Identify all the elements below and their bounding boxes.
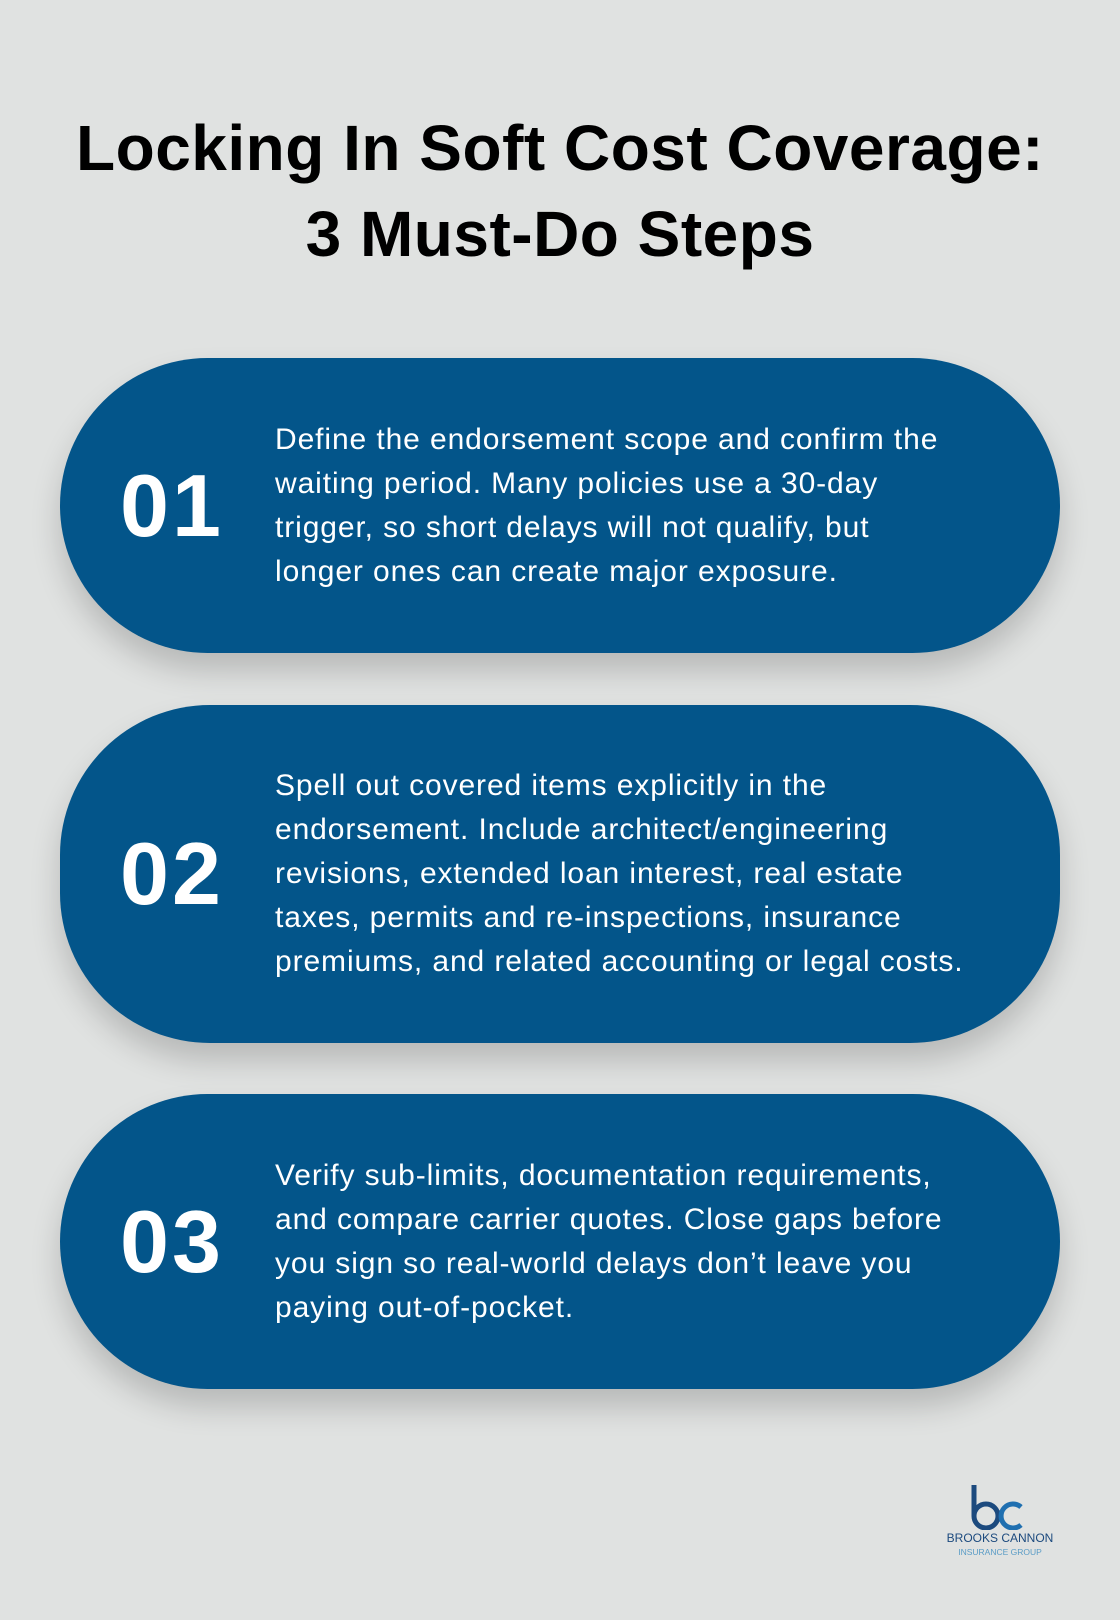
panel: step 01 — [60, 358, 1060, 653]
logo text — [947, 1531, 1053, 1557]
title: Locking In Soft Cost Coverage: — [76, 112, 1044, 184]
title: 3 Must-Do Steps — [306, 198, 814, 270]
logo — [947, 1485, 1053, 1557]
text step 01: Define the endorsement scope and confirm the — [275, 422, 938, 456]
panel: step 03 — [60, 1094, 1060, 1389]
logo text: INSURANCE GROUP — [958, 1547, 1042, 1557]
text step 02 — [275, 769, 964, 978]
number 03: 03 — [120, 1192, 224, 1290]
text step 01: longer ones can create major exposure. — [275, 554, 838, 588]
title — [76, 112, 1044, 270]
text step 01: trigger, so short delays will not qualify, but — [275, 510, 869, 544]
text step 02: taxes, permits and re-inspections, insurance — [275, 901, 902, 934]
text step 02: Spell out covered items explicitly in the — [275, 769, 827, 802]
text step 03: you sign so real-world delays don’t leave you — [275, 1246, 912, 1280]
number 02: 02 — [120, 824, 224, 923]
text step 01 — [275, 422, 938, 588]
text step 03 — [275, 1158, 943, 1324]
text step 03: paying out-of-pocket. — [275, 1290, 574, 1324]
icon: bc mark — [972, 1485, 1023, 1530]
text step 02: endorsement. Include architect/engineering — [275, 813, 888, 846]
text step 03: and compare carrier quotes. Close gaps before — [275, 1202, 943, 1236]
text step 02: premiums, and related accounting or legal costs. — [275, 945, 964, 978]
logo text: BROOKS CANNON — [947, 1531, 1053, 1545]
text step 03: Verify sub-limits, documentation requirements, — [275, 1158, 932, 1192]
panel: step 02 — [60, 705, 1060, 1043]
number 01: 01 — [120, 456, 224, 554]
text step 01: waiting period. Many policies use a 30-day — [275, 466, 878, 500]
text step 02: revisions, extended loan interest, real estate — [275, 857, 903, 890]
